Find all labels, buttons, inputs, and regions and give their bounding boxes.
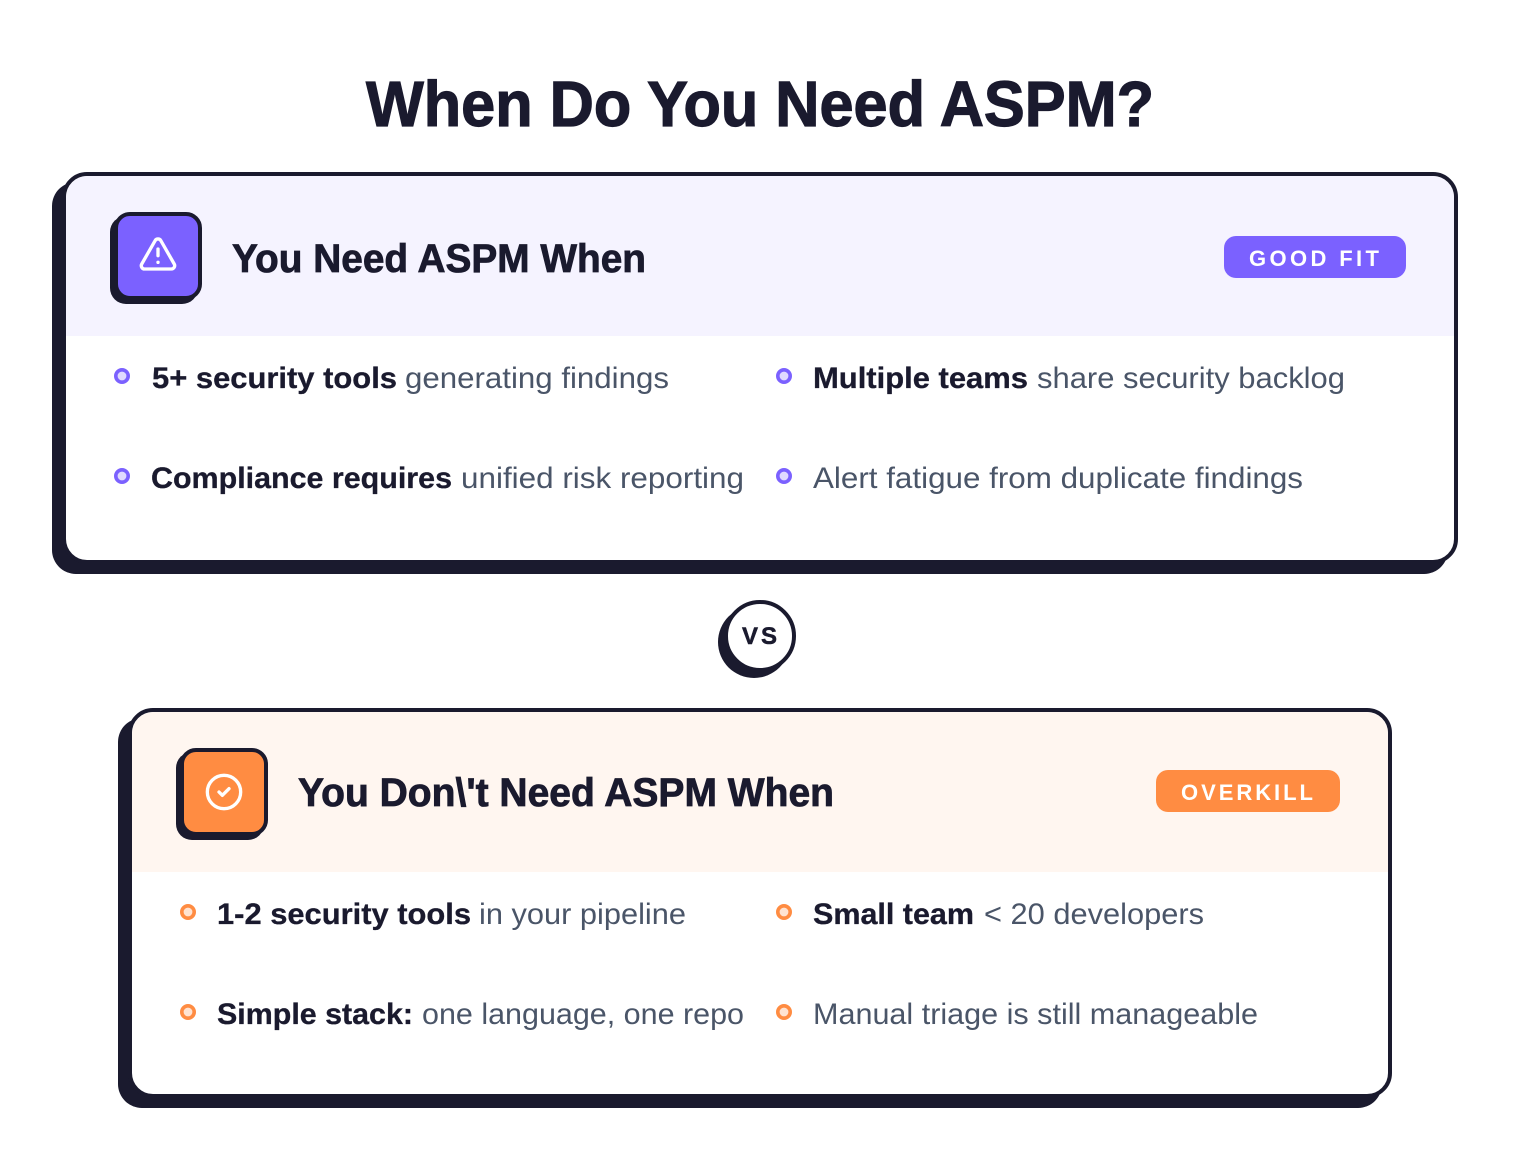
icon: warning triangle: [110, 214, 200, 304]
list item: simple stack: one language, one repo: [422, 998, 744, 1031]
list item: 1-2 security tools: 1-2 security tools: [217, 898, 471, 931]
badge: overkill: [1156, 770, 1340, 812]
vs badge: VS: [742, 623, 777, 650]
list item: 1-2 security tools: in your pipeline: [479, 898, 686, 931]
icon: check circle: [176, 750, 266, 840]
list item: security tools: generating findings: [405, 362, 669, 395]
title: When Do You Need ASPM?: [366, 68, 1154, 140]
panel header: good fit: [66, 176, 1454, 336]
list item: multiple teams: share security backlog: [1037, 362, 1345, 395]
badge: overkill: OVERKILL: [1181, 780, 1313, 805]
list item: compliance: Compliance requires: [151, 462, 452, 495]
list item: security tools: [116, 362, 669, 395]
list item: small team: < 20 developers: [984, 898, 1204, 931]
vs badge: [718, 602, 794, 678]
list item: multiple teams: [778, 362, 1345, 395]
list item: simple stack: Simple stack:: [217, 998, 413, 1031]
panel: you don't need ASPM when: [118, 710, 1390, 1108]
panel header: overkill: [132, 712, 1388, 872]
badge: good fit: [1224, 236, 1406, 278]
heading: you don't need ASPM when: You Don\'t Need ASPM When: [298, 771, 834, 815]
list item: compliance: [116, 462, 744, 495]
list item: multiple teams: Multiple teams: [813, 362, 1028, 395]
list item: small team: [778, 898, 1204, 931]
list item: 1-2 security tools: [182, 898, 686, 931]
list item: security tools: 5+ security tools: [152, 362, 397, 395]
panel: you need ASPM when: [52, 174, 1456, 574]
list item: compliance: unified risk reporting: [461, 462, 744, 495]
heading: you need ASPM when: You Need ASPM When: [232, 237, 646, 281]
list item: alert fatigue: Alert fatigue from duplicate findings: [813, 462, 1303, 495]
list item: small team: Small team: [813, 898, 974, 931]
list item: manual triage: Manual triage is still manageable: [813, 998, 1258, 1031]
list item: simple stack: [182, 998, 744, 1031]
badge: good fit: GOOD FIT: [1249, 246, 1380, 271]
